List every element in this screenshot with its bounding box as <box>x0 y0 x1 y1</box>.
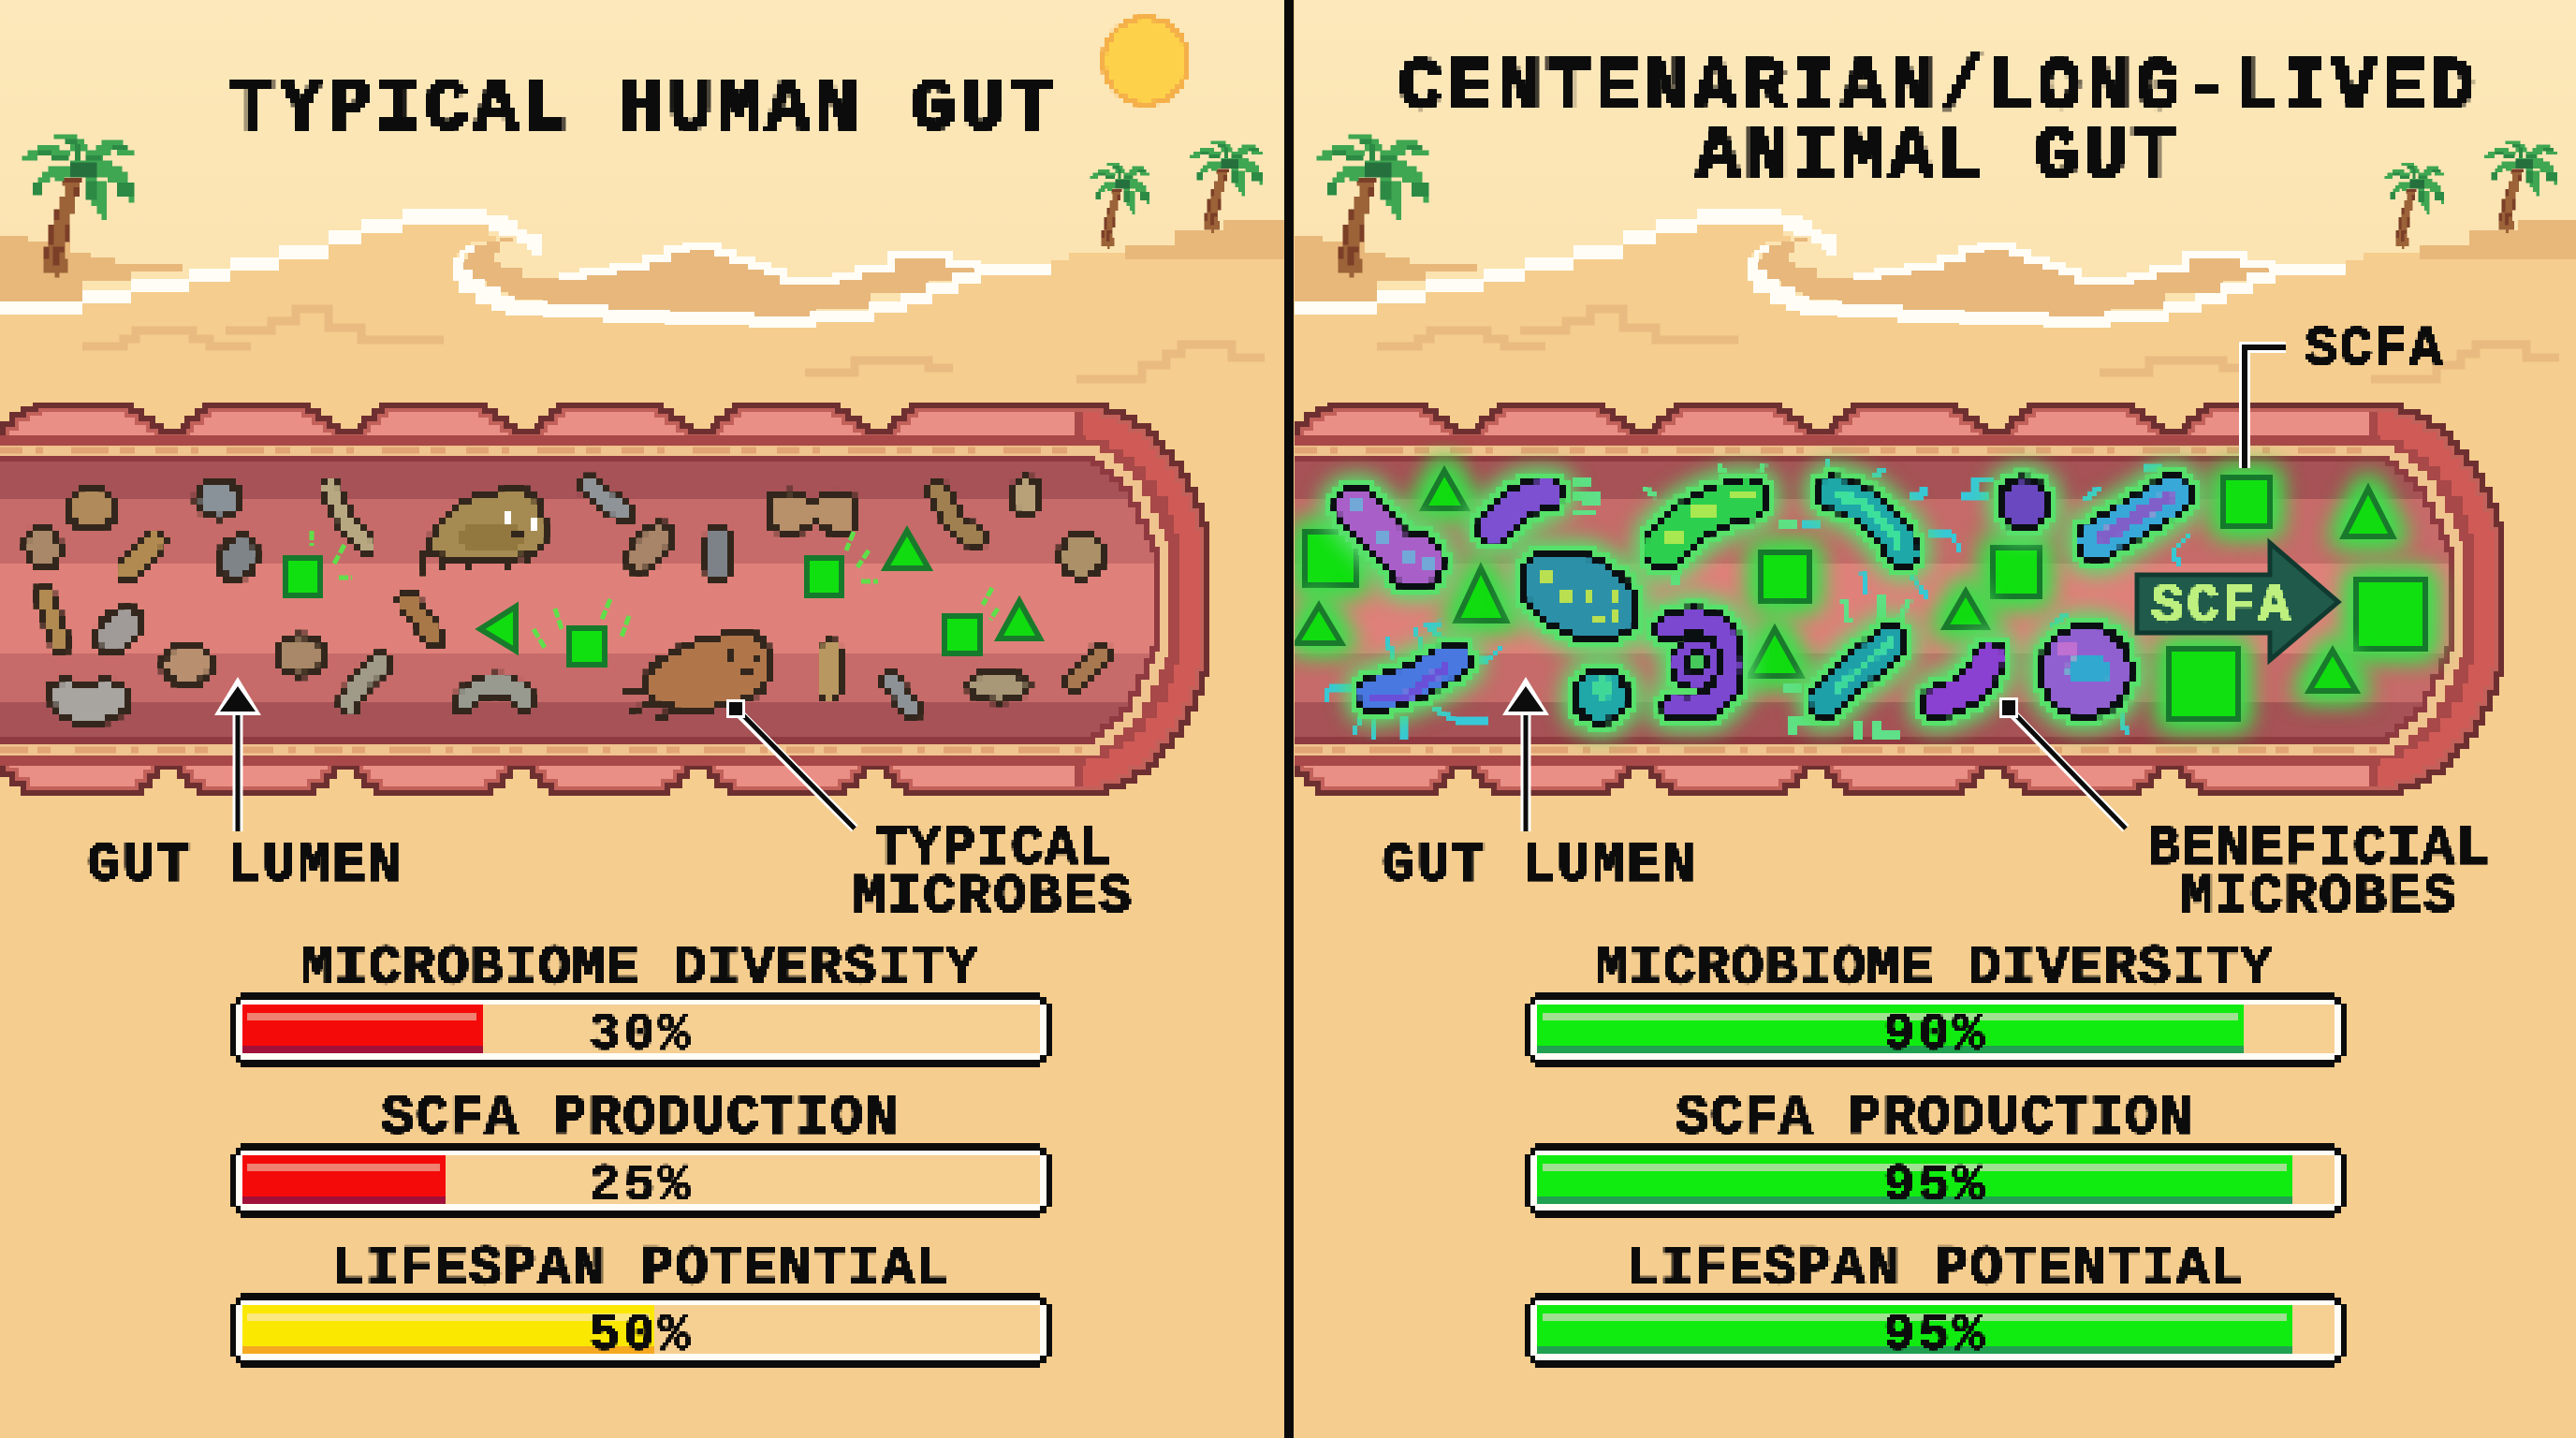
large mite microbe <box>421 491 545 573</box>
metric: lifespan potential 50%: LIFESPAN POTENTIAL <box>331 1238 949 1300</box>
glowing SCFA triangles <box>1296 471 2393 691</box>
metric: SCFA production 25%: 25% <box>589 1155 690 1215</box>
title: centenarian / long-lived animal gut: CENTENARIAN/LONG-LIVED <box>1398 46 2475 130</box>
metric: microbiome diversity 90% <box>1525 937 2347 1067</box>
blue rod <box>2097 494 2174 541</box>
metric: SCFA production 25%: SCFA PRODUCTION <box>381 1087 898 1150</box>
metric: SCFA production 95%: 95% <box>1883 1155 1984 1215</box>
arrow: beneficial microbes <box>1999 697 2126 829</box>
title: typical human gut: TYPICAL HUMAN GUT <box>230 66 1053 151</box>
metric: SCFA production 25% <box>230 1087 1052 1218</box>
purple rod <box>1353 501 1445 592</box>
arrow: gut lumen <box>1502 677 1549 831</box>
glowing SCFA squares <box>1305 477 2425 719</box>
small teal microbe <box>1574 669 1627 722</box>
label: typical microbes: TYPICAL <box>874 817 1112 880</box>
label: beneficial microbes <box>2147 817 2489 929</box>
label: typical microbes <box>853 817 1132 929</box>
desert scene background <box>0 0 1288 1438</box>
icon: sun <box>1101 15 1191 107</box>
label: beneficial microbes: MICROBES <box>2180 866 2456 929</box>
purple curved rod <box>1938 658 1990 702</box>
teal rod <box>1825 642 1889 700</box>
flagella <box>1327 459 2190 741</box>
metric: lifespan potential 50% <box>230 1238 1052 1368</box>
title: centenarian / long-lived animal gut <box>1398 46 2475 198</box>
beneficial microbes <box>1327 459 2190 741</box>
label: beneficial microbes: BENEFICIAL <box>2147 817 2489 880</box>
gut tube cross-section <box>0 398 1217 800</box>
blue microbe <box>1374 661 1453 698</box>
metric: lifespan potential 95%: 95% <box>1883 1305 1984 1365</box>
panel: typical human gut <box>0 0 1288 1438</box>
metric: microbiome diversity 30%: MICROBIOME DIVERSITY <box>300 937 979 1000</box>
SCFA particles: low level <box>285 531 1040 665</box>
teal oval microbe <box>1506 534 1652 657</box>
large brown microbe <box>625 633 770 723</box>
metric: microbiome diversity 30%: 30% <box>589 1005 690 1064</box>
panel: centenarian / long-lived animal gut <box>1295 0 2576 1438</box>
metric: lifespan potential 95%: LIFESPAN POTENTIAL <box>1626 1238 2244 1300</box>
title: centenarian / long-lived animal gut: ANIMAL GUT <box>1696 114 2175 198</box>
purple round microbe <box>2041 626 2130 716</box>
label: SCFA: SCFA <box>2305 318 2443 381</box>
purple spiral microbe <box>1668 621 1730 708</box>
SCFA production arrow <box>2137 543 2338 660</box>
SCFA production arrow: SCFA <box>2151 577 2291 638</box>
label: typical microbes: MICROBES <box>853 866 1132 929</box>
arrow: SCFA leader line <box>2245 347 2286 468</box>
teal curved rod <box>1833 493 1903 552</box>
label: gut lumen: GUT LUMEN <box>1382 834 1695 897</box>
panel divider <box>1284 0 1294 1438</box>
purple curved rod upper <box>1494 493 1546 528</box>
metric: SCFA production 95%: SCFA PRODUCTION <box>1676 1087 2192 1150</box>
metric: microbiome diversity 30% <box>230 937 1052 1067</box>
metric: lifespan potential 95% <box>1525 1238 2347 1368</box>
gut tube cross-section <box>1295 398 2511 800</box>
green rod <box>1663 492 1753 548</box>
metric: microbiome diversity 90%: MICROBIOME DIVERSITY <box>1595 937 2274 1000</box>
desert scene background <box>1295 0 2576 1438</box>
metric: lifespan potential 50%: 50% <box>589 1305 690 1365</box>
typical microbes <box>21 477 1104 723</box>
label: gut lumen: GUT LUMEN <box>87 834 401 897</box>
metric: microbiome diversity 90%: 90% <box>1883 1005 1984 1064</box>
metric: SCFA production 95% <box>1525 1087 2347 1218</box>
arrow: typical microbes <box>726 699 855 829</box>
arrow: gut lumen <box>214 677 261 831</box>
